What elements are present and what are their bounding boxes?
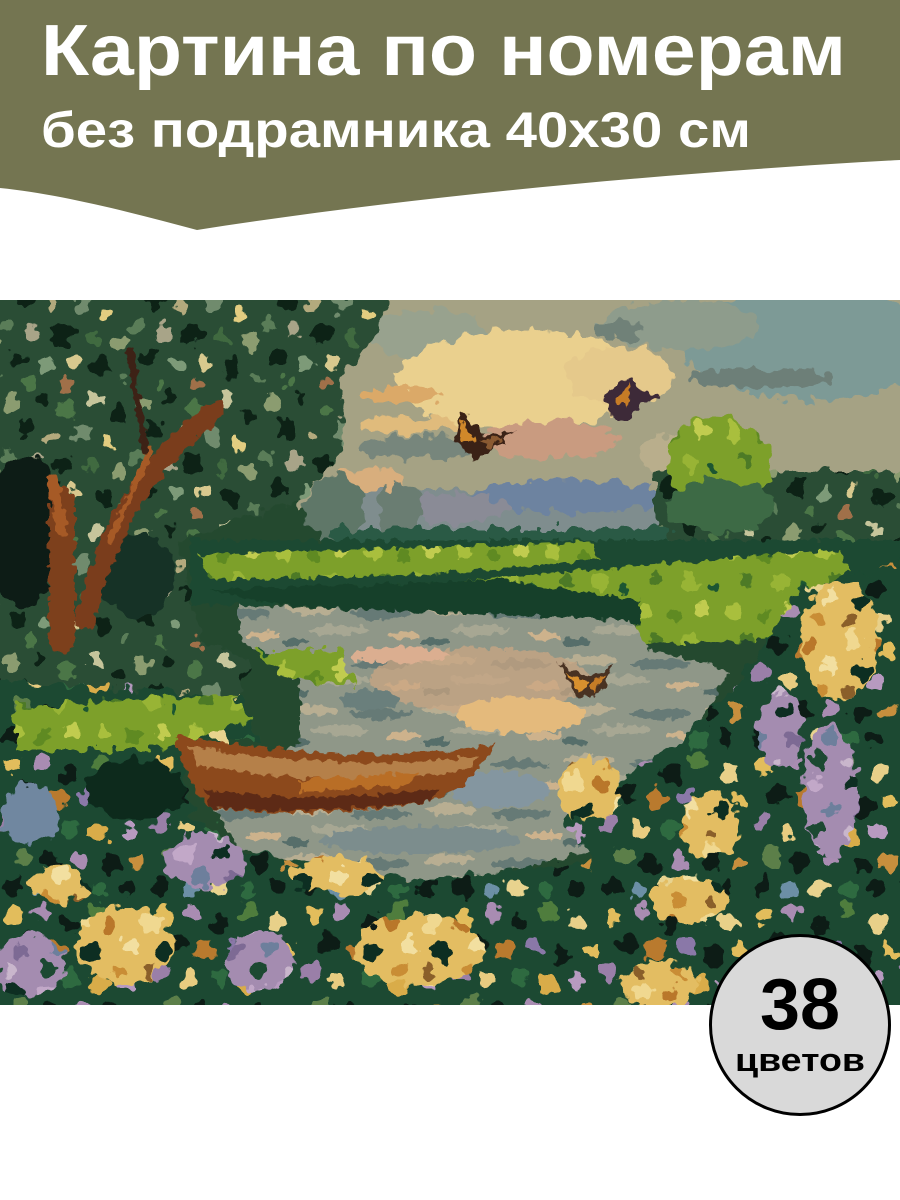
water <box>210 605 730 890</box>
title: Картина по номерам <box>41 11 846 91</box>
painting: river landscape with boat <box>0 300 900 1005</box>
tree trunk <box>52 350 215 640</box>
icon: butterfly upper <box>603 377 660 420</box>
meadow <box>190 540 900 645</box>
sky <box>300 290 900 530</box>
icon: butterfly lower <box>559 663 612 698</box>
boat <box>175 735 495 813</box>
distant trees <box>305 417 900 555</box>
badge number: 38 <box>760 965 840 1045</box>
subtitle: без подрамника 40х30 см <box>41 102 751 158</box>
foreground: flowers and grass <box>0 560 900 1015</box>
icon: butterfly middle <box>455 411 515 460</box>
tree canopy <box>0 290 390 720</box>
badge: colour count <box>710 936 890 1114</box>
banner: olive header <box>0 0 900 230</box>
badge label: цветов <box>735 1042 865 1078</box>
